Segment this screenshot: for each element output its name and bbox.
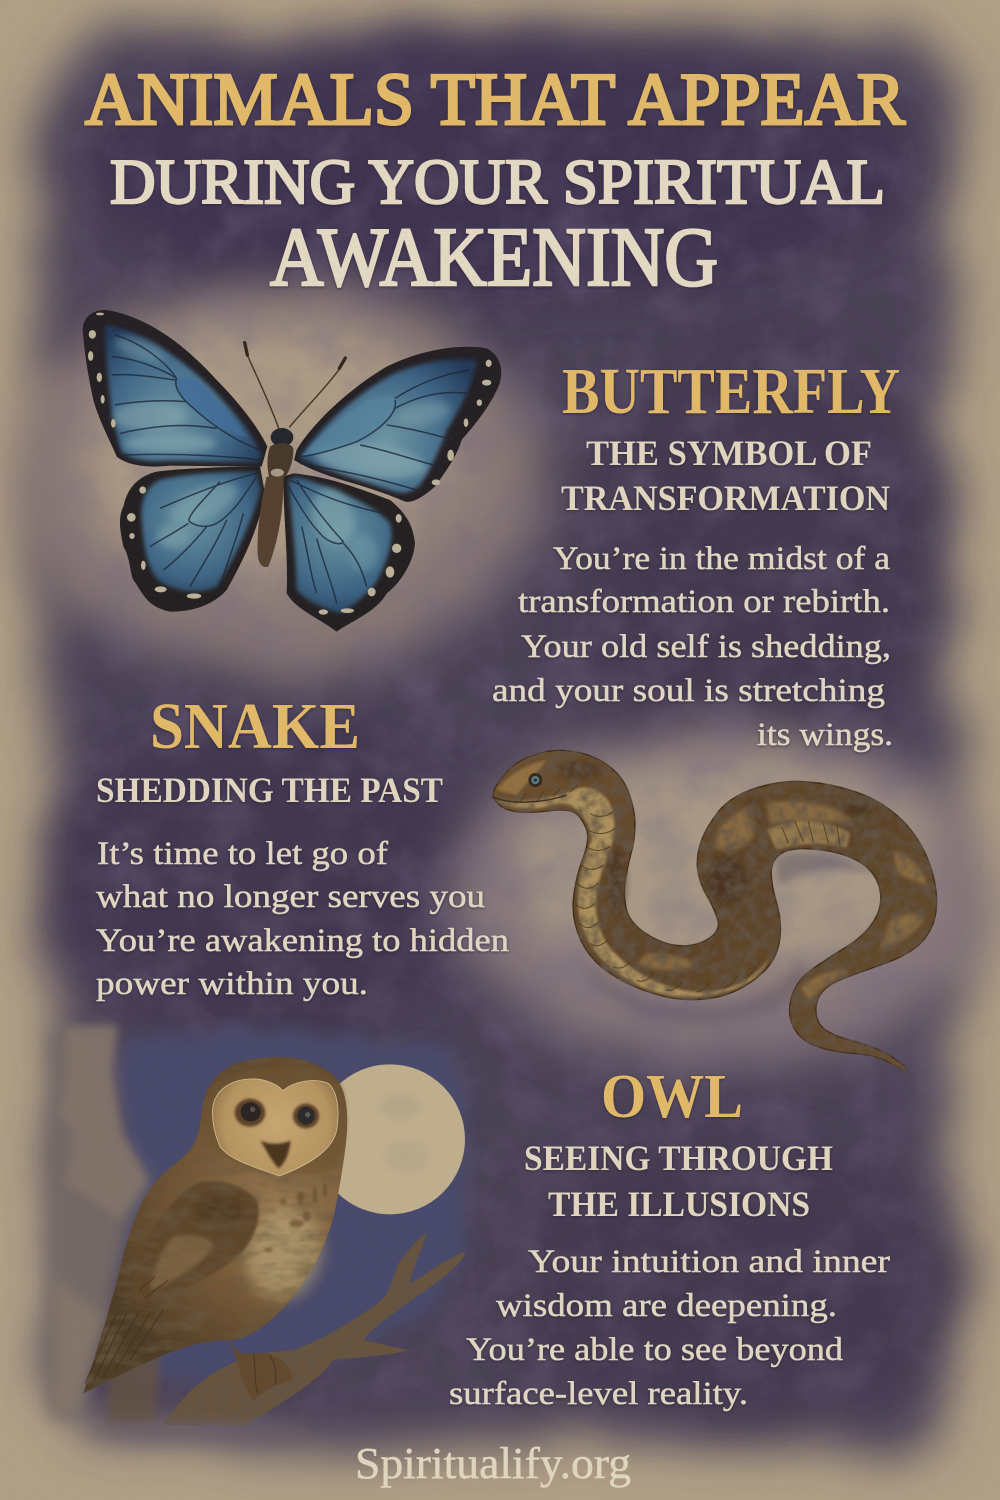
illustration: owl on branch with moon: [50, 1023, 467, 1442]
heading: snake section text: power within you.: [96, 966, 368, 1002]
snake mouth line: [492, 795, 567, 802]
heading: owl section text: OWL: [601, 1063, 743, 1131]
heading: butterfly section text: its wings.: [757, 717, 893, 753]
butterfly body: [258, 428, 293, 567]
owl body silhouette: [83, 1057, 347, 1393]
illustration: butterfly: [83, 310, 501, 632]
snake dorsal mottling: [637, 801, 927, 1003]
owl wing shoulder shade: [197, 1193, 243, 1227]
illustration: snake: [492, 750, 937, 1070]
snake belly scales: [497, 788, 770, 997]
talon lines: [253, 1353, 276, 1393]
snake mid scales: [767, 822, 850, 850]
heading: butterfly section text: BUTTERFLY: [562, 355, 900, 428]
tree trunk soft base: [50, 1023, 152, 1417]
snake head detail: [497, 760, 547, 795]
title: ANIMALS THAT APPEAR: [85, 59, 906, 141]
heading: butterfly section text: THE SYMBOL OF: [586, 433, 872, 473]
heading: snake section text: [96, 690, 509, 1002]
title: DURING YOUR SPIRITUAL: [110, 146, 885, 217]
butterfly antennae: [245, 343, 345, 428]
heading: owl section text: Your intuition and inner: [528, 1244, 890, 1280]
heading: owl section text: wisdom are deepening.: [496, 1288, 837, 1324]
heading: snake section text: You’re awakening to hidden: [96, 923, 509, 959]
title: AWAKENING: [270, 211, 718, 304]
lower trunk below tail: [107, 1353, 160, 1423]
snake shadow: [580, 953, 813, 1020]
owl beak: [261, 1141, 291, 1168]
owl: [83, 1057, 347, 1393]
heading: snake section text: SHEDDING THE PAST: [96, 770, 443, 810]
heading: owl section text: SEEING THROUGH: [524, 1138, 833, 1178]
owl head shading: [204, 1066, 346, 1176]
heading: butterfly section text: [492, 355, 900, 753]
snake inner loop shadow: [773, 852, 877, 887]
heading: owl section text: You’re able to see beyond: [466, 1332, 844, 1368]
heading: butterfly section text: You’re in the midst of a: [553, 541, 890, 577]
snake silhouette: [493, 750, 937, 1070]
snake body group: [493, 750, 937, 1070]
owl wing: [133, 1181, 259, 1303]
title: [85, 59, 906, 304]
branch: [163, 1233, 465, 1425]
snake scale lines: [520, 785, 840, 992]
left hindwing: [120, 467, 265, 612]
heading: butterfly section text: TRANSFORMATION: [561, 478, 890, 518]
heading: owl section text: [449, 1063, 890, 1412]
right hindwing: [283, 473, 415, 632]
heading: butterfly section text: and your soul is stretching: [492, 673, 885, 709]
trunk lower: [53, 1273, 107, 1413]
heading: butterfly section text: Your old self is shedding,: [521, 629, 891, 665]
heading: owl section text: surface-level reality.: [449, 1376, 748, 1412]
owl breast highlight: [236, 1199, 331, 1308]
footer: website name: Spiritualify.org: [355, 1439, 631, 1488]
bottom fade: [87, 1421, 307, 1442]
right forewing: [294, 347, 501, 502]
owl feathers: [85, 1277, 168, 1383]
heading: snake section text: It’s time to let go of: [97, 836, 388, 872]
left forewing: [83, 310, 267, 467]
background: light glow behind snake: [450, 725, 1000, 1065]
trunk highlight: [57, 1027, 147, 1220]
heading: owl section text: THE ILLUSIONS: [548, 1184, 810, 1224]
owl facial disc: [212, 1079, 338, 1176]
heading: snake section text: SNAKE: [150, 690, 360, 763]
owl eyes: [235, 1099, 319, 1128]
heading: snake section text: what no longer serves you: [96, 879, 485, 915]
snake eye: [528, 773, 542, 787]
background: light glow behind butterfly: [10, 285, 550, 675]
owl wing highlight: [150, 1235, 213, 1290]
owl talons: [227, 1340, 293, 1400]
background: cloud mottling: [78, 82, 927, 1395]
owl breast speckles: [264, 1182, 327, 1252]
moon: [315, 1064, 465, 1214]
heading: butterfly section text: transformation or rebirth.: [518, 584, 890, 620]
night sky wash: [120, 1032, 467, 1383]
